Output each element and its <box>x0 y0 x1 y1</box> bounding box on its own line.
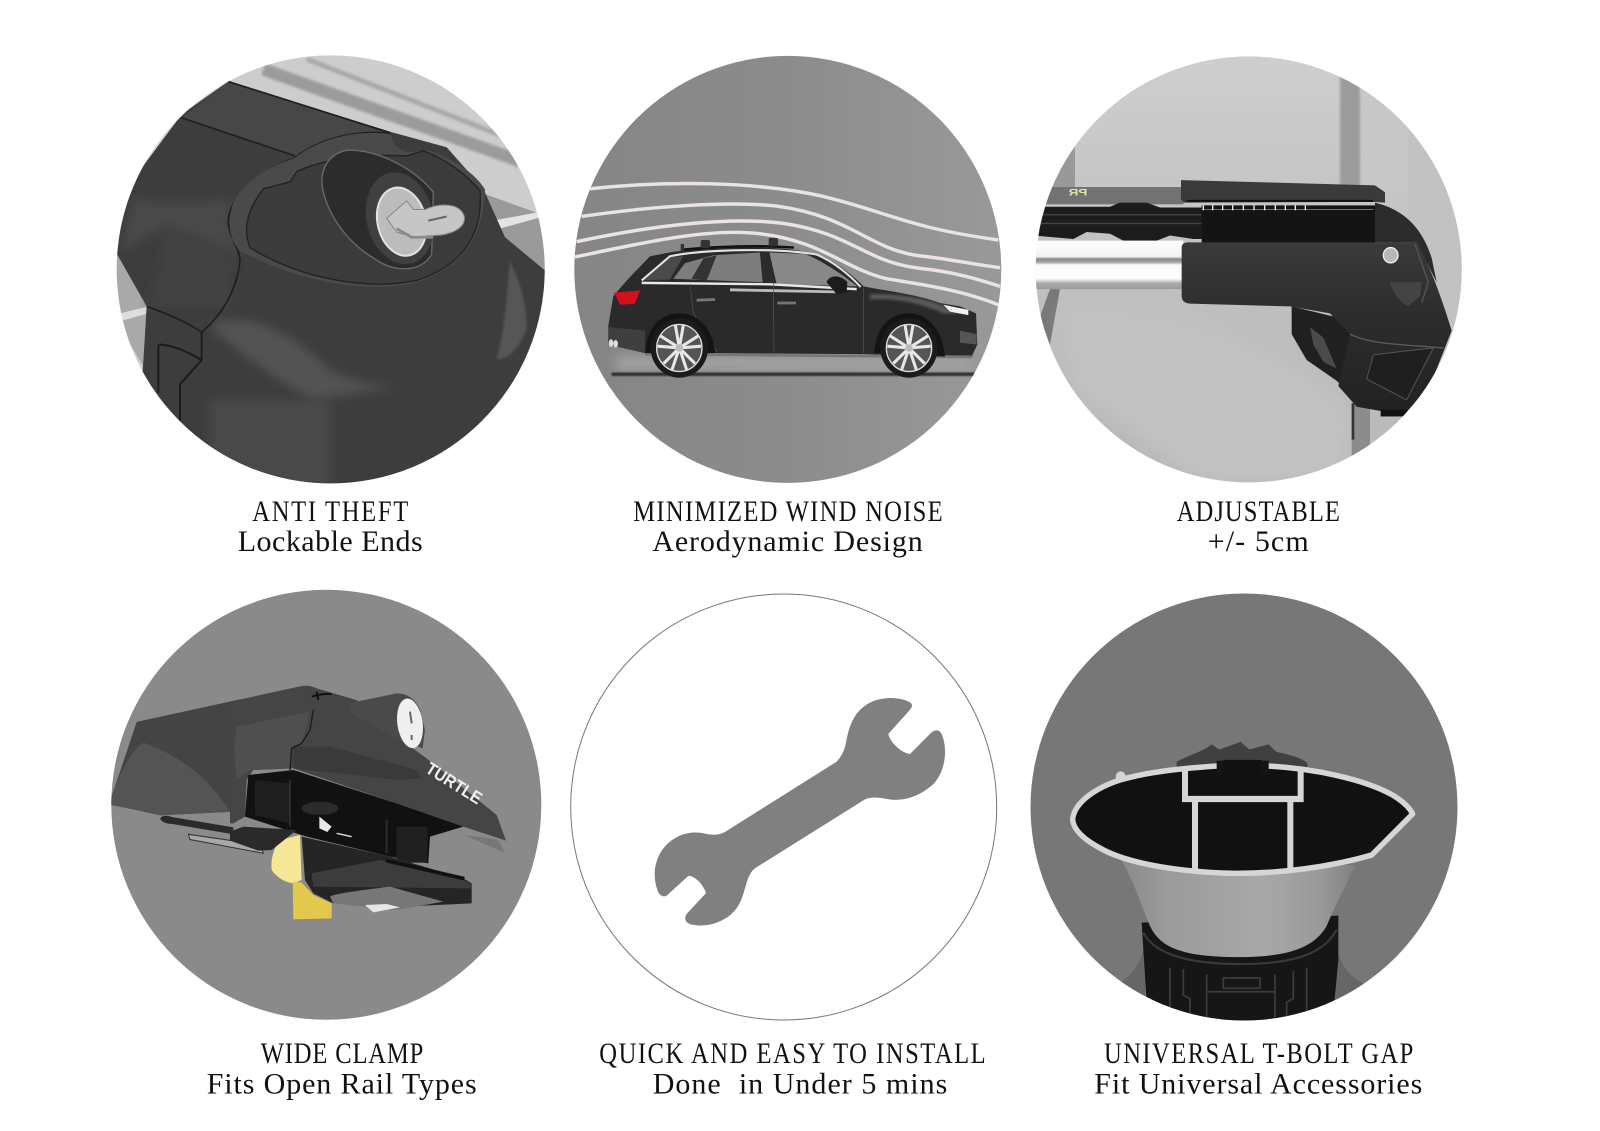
caption: wind noise: Aerodynamic Design <box>652 525 923 558</box>
door lines <box>690 284 863 353</box>
caption: t-bolt gap: Fit Universal Accessories <box>1094 1068 1422 1100</box>
caption: quick install: QUICK AND EASY TO INSTALL <box>599 1037 986 1070</box>
photo: clamp underside <box>100 580 550 1040</box>
lock cylinder <box>322 150 433 269</box>
vertical post <box>1340 61 1360 192</box>
chrome trim <box>642 250 861 287</box>
rail tube <box>110 699 263 853</box>
caption: quick install: Done in Under 5 mins <box>653 1068 947 1100</box>
roof rails <box>682 246 794 250</box>
caption: t-bolt gap <box>1094 1037 1422 1100</box>
panel: anti theft <box>116 55 545 552</box>
tower base <box>1142 916 1338 1030</box>
caption: wide clamp: Fits Open Rail Types <box>207 1068 477 1100</box>
car <box>608 238 977 378</box>
photo: lockable end cap <box>116 55 545 484</box>
photo: car with airflow lines <box>574 56 1002 483</box>
lock plate <box>230 133 485 287</box>
seam of end cap <box>147 133 390 332</box>
top band <box>182 82 390 158</box>
pedestal <box>1122 860 1355 957</box>
body shading <box>120 199 527 490</box>
slot opening <box>1217 761 1269 775</box>
panel: wide clamp <box>100 580 550 1100</box>
caption: wide clamp: WIDE CLAMP <box>261 1037 423 1070</box>
caption: anti theft <box>238 495 423 558</box>
black channel <box>1033 203 1203 241</box>
ground shadow <box>612 373 975 376</box>
brand text: TURTLE <box>422 758 486 808</box>
rail top band <box>1033 187 1183 204</box>
buckle <box>1367 348 1433 400</box>
rack body <box>113 82 547 490</box>
mirrored logo: PR <box>1069 189 1087 198</box>
panel: t-bolt gap <box>1030 580 1510 1100</box>
wheels <box>645 313 945 378</box>
clamp underside <box>1292 306 1350 383</box>
internal walls <box>1185 769 1301 871</box>
arm <box>1375 203 1437 282</box>
panel: quick install <box>571 594 997 1100</box>
tail light <box>614 291 640 305</box>
top slider <box>1181 180 1385 203</box>
mirror <box>827 276 847 294</box>
bolt bump <box>1116 771 1126 782</box>
windows <box>673 252 763 282</box>
main foot <box>1182 242 1452 412</box>
floor shading <box>1063 310 1350 483</box>
outlined circle <box>571 594 997 1020</box>
photo: bar cross-section <box>1030 580 1510 1064</box>
clamp interior <box>245 770 463 863</box>
clamp foot <box>230 686 506 919</box>
yellow knob <box>271 835 302 883</box>
foot body <box>230 686 506 841</box>
exhausts <box>609 339 613 347</box>
photo: sliding rail foot <box>1036 56 1462 482</box>
bolt <box>1383 248 1398 263</box>
panel: adjustable <box>1036 56 1462 552</box>
caption: anti theft: ANTI THEFT <box>252 495 408 528</box>
hook <box>230 827 297 851</box>
bar profile <box>1073 766 1413 873</box>
lock cylinder <box>348 693 425 748</box>
t-slot cover <box>1177 742 1307 774</box>
caption: anti theft: Lockable Ends <box>238 525 423 558</box>
caption: adjustable: +/- 5cm <box>1208 525 1309 558</box>
panel: wind noise <box>574 56 1002 558</box>
lower plate <box>302 837 472 907</box>
foot flares <box>1122 943 1145 1030</box>
slider interior <box>1202 205 1375 243</box>
headlight <box>943 305 968 315</box>
caption: adjustable: ADJUSTABLE <box>1177 495 1340 528</box>
caption: wind noise: MINIMIZED WIND NOISE <box>633 495 943 528</box>
airflow lines <box>575 183 1000 305</box>
caption: adjustable <box>1177 495 1340 558</box>
icon: wrench <box>655 698 945 926</box>
road lighter band <box>617 356 970 371</box>
scale ticks <box>1203 205 1305 210</box>
key <box>387 201 464 237</box>
caption: wide clamp <box>207 1037 477 1100</box>
caption: t-bolt gap: UNIVERSAL T-BOLT GAP <box>1104 1037 1413 1070</box>
caption: wind noise <box>633 495 943 558</box>
chrome bar <box>1033 241 1183 289</box>
caption: quick install <box>599 1037 986 1100</box>
